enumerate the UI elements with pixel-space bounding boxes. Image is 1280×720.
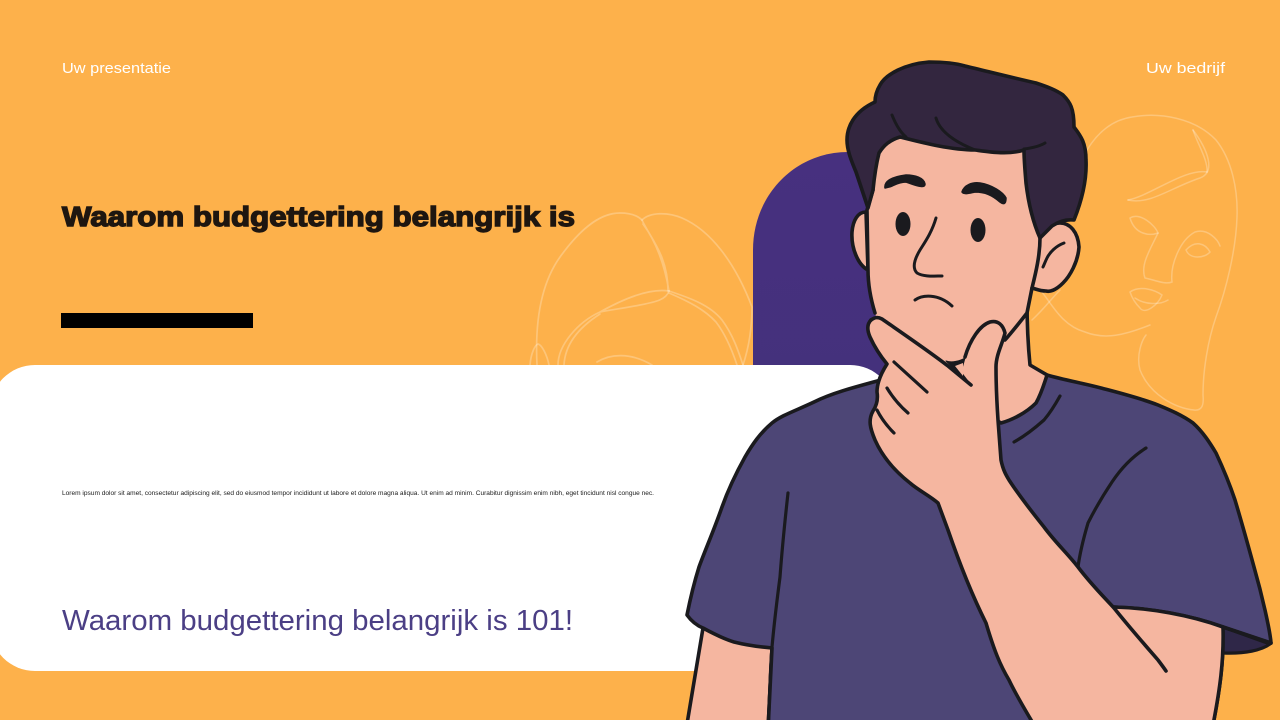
dark sleeve inner [1223,627,1270,653]
header: presentation label: Uw presentatie [62,60,171,77]
hair [847,62,1086,238]
line art: left face [530,213,752,365]
forearm and hand [868,318,1223,720]
title: Waarom budgettering belangrijk is [62,201,575,232]
mouth [915,296,952,306]
knuckle lines [877,362,927,433]
subtitle: Waarom budgettering belangrijk is 101! [62,605,573,637]
face [867,132,1045,361]
line art: right face [1032,115,1237,410]
eye right [970,218,986,242]
title accent bar [61,313,253,328]
shirt [687,350,1271,720]
right ear [1032,223,1079,291]
left arm [686,628,772,720]
header: company label: Uw bedrijf [1146,60,1226,77]
eye left [896,212,910,236]
right upper arm [1040,600,1223,720]
left ear [852,212,868,270]
shadow under chin [946,358,971,385]
nose [914,218,942,276]
eyebrow left [885,175,925,188]
hair strand lines [892,115,1045,150]
purple arch behind figure [753,152,960,400]
shirt sleeve seam and folds [768,396,1146,720]
arm and hand outlines [868,318,1271,720]
eyebrow right [962,183,1006,204]
neck [875,300,1047,423]
illustration: thinking man [686,62,1271,720]
ear detail [1043,243,1064,267]
panel: white content card [0,365,895,671]
body text: Lorem ipsum dolor sit amet, consectetur adipiscing elit, sed do eiusmod tempor incididunt ut labore et dolore magna aliqua. Ut enim ad minim. Curabitur dignissim enim nibh, eget tincidunt nisl congue nec. [62,490,654,497]
